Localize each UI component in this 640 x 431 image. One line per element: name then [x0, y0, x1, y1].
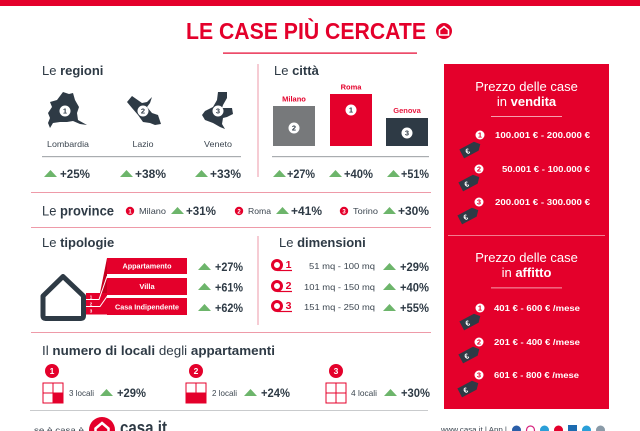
province: Milano: Milano	[139, 206, 166, 216]
stat: Villa	[198, 282, 243, 294]
item: 4 locali: 4 locali	[351, 388, 377, 398]
heading: affitto: in affitto	[502, 265, 551, 280]
province: Milano: +31%	[186, 206, 216, 218]
item: 3 locali	[43, 364, 146, 403]
province: Torino: +30%	[398, 206, 429, 218]
row: 101-150 mq: 101 mq - 150 mq	[304, 282, 375, 292]
icon: house with ribbons: 1	[90, 294, 93, 299]
icon: house with ribbons: 2	[90, 301, 93, 306]
stat: Genova: +51%	[401, 169, 429, 181]
stat: Lazio	[120, 169, 166, 181]
map: Lombardia: 1	[63, 106, 67, 116]
stat: Roma: +40%	[344, 169, 373, 181]
province: Milano: 1	[128, 209, 132, 215]
row: affitto 3	[457, 370, 579, 397]
province: Roma	[235, 206, 322, 218]
bar: Milano: Milano	[282, 94, 306, 104]
row: 151-250 mq: 151 mq - 250 mq	[304, 302, 375, 312]
row: affitto 2: 2	[477, 338, 481, 346]
stat: Milano: +27%	[287, 169, 315, 181]
heading: città: Le città	[274, 63, 320, 78]
labels	[47, 139, 232, 149]
row: affitto 1: 401 € - 600 € /mese	[494, 303, 580, 313]
row: affitto 1	[459, 303, 580, 330]
row: 51-100 mq: +29%	[400, 262, 429, 274]
row: 51-100 mq	[272, 259, 429, 274]
footer links	[440, 425, 605, 431]
stat: Lombardia: +25%	[60, 169, 90, 181]
row: vendita 2: 2	[477, 164, 481, 174]
province: Roma: 2	[237, 209, 241, 215]
item: 4 locali: +30%	[401, 388, 430, 400]
row: 151-250 mq	[272, 300, 429, 315]
item: 4 locali	[326, 364, 430, 403]
map: Veneto	[202, 92, 233, 129]
item: 3 locali: 3 locali	[69, 388, 94, 398]
heading: vendita	[475, 79, 578, 117]
bar: Genova: 3	[405, 128, 409, 138]
panel: città	[272, 63, 429, 181]
row: vendita 1: 100.001 € - 200.000 €	[495, 130, 590, 140]
heading: affitto	[475, 250, 578, 288]
panel: province	[42, 204, 429, 218]
row: 151-250 mq: 3	[286, 300, 292, 312]
stat: Veneto: +33%	[210, 169, 241, 181]
title: LE CASE PIÙ CERCATE	[186, 17, 426, 44]
row: 151-250 mq: +55%	[400, 303, 429, 315]
bar: Genova	[386, 106, 428, 146]
map: Lazio	[127, 96, 161, 125]
row: vendita 1	[459, 130, 590, 158]
row: vendita 3	[457, 197, 590, 224]
row: affitto 1: 1	[478, 304, 482, 312]
map: Lombardia	[48, 92, 87, 128]
bar: Roma: 1	[349, 106, 353, 114]
stat: Casa Indipendente: +62%	[215, 303, 243, 315]
row: affitto 3: 601 € - 800 € /mese	[494, 370, 579, 380]
item: 3 locali: 1	[50, 366, 55, 376]
province: Torino: Torino	[353, 206, 378, 216]
row: affitto 2	[458, 337, 580, 363]
heading: numero di locali: Il numero di locali degli appartamenti	[42, 343, 275, 358]
row: vendita 2: 50.001 € - 100.000 €	[502, 164, 590, 174]
item: 3 locali: +29%	[117, 388, 146, 400]
bar: Roma	[330, 82, 372, 146]
item: 2 locali	[186, 364, 290, 403]
stat: Genova	[387, 169, 429, 181]
stat: Milano	[273, 169, 315, 181]
row: vendita 3: 200.001 € - 300.000 €	[495, 197, 590, 207]
bar: Milano	[273, 94, 315, 146]
row: 101-150 mq: 2	[286, 280, 292, 292]
row: 101-150 mq: +40%	[400, 282, 429, 294]
province: Milano	[126, 206, 216, 218]
item: 2 locali: 2 locali	[212, 388, 237, 398]
stat: Casa Indipendente	[198, 303, 243, 315]
bar: Roma: Roma	[341, 82, 362, 92]
labels: Lombardia	[47, 139, 89, 149]
heading: province: Le province	[42, 204, 114, 218]
row: affitto 2: 201 € - 400 € /mese	[494, 337, 580, 347]
bar: Milano: 2	[292, 124, 296, 132]
map: Veneto: 3	[216, 106, 220, 116]
row: 101-150 mq	[272, 280, 429, 294]
map: Lazio: 2	[141, 106, 145, 116]
row: vendita 2	[458, 164, 590, 191]
row: 51-100 mq: 51 mq - 100 mq	[309, 261, 375, 271]
icon: title house	[436, 23, 452, 39]
footer logo	[34, 417, 167, 431]
panel: numero di locali	[42, 343, 430, 403]
top bar	[0, 0, 640, 6]
item: 2 locali: 2	[194, 366, 199, 376]
stat: Lazio: +38%	[135, 169, 166, 181]
row: vendita 1: 1	[478, 130, 482, 140]
stat: Veneto	[195, 169, 241, 181]
stat: Lombardia	[44, 169, 90, 181]
panel: regioni	[42, 63, 241, 181]
panel: tipologie	[42, 235, 243, 318]
stat: Appartamento: +27%	[215, 262, 243, 274]
heading: vendita: in vendita	[497, 94, 557, 109]
heading: vendita: Prezzo delle case	[475, 79, 578, 94]
heading: dimensioni: Le dimensioni	[279, 235, 366, 250]
item: 4 locali: 3	[334, 366, 339, 376]
heading: regioni: Le regioni	[42, 63, 103, 78]
item: 2 locali: +24%	[261, 388, 290, 400]
row: 51-100 mq: 1	[286, 259, 292, 271]
province: Torino: 3	[342, 209, 346, 215]
icon: house with ribbons: Casa Indipendente	[115, 302, 179, 312]
province: Roma: Roma	[248, 206, 271, 216]
heading: affitto: Prezzo delle case	[475, 250, 578, 265]
province: Torino	[340, 206, 429, 218]
icon: house with ribbons: Appartamento	[122, 262, 172, 270]
labels: Lazio	[132, 139, 154, 149]
bar: Genova: Genova	[393, 106, 422, 115]
stat: Appartamento	[198, 262, 243, 274]
panel: dimensioni	[272, 235, 429, 315]
heading: tipologie: Le tipologie	[42, 235, 114, 250]
icon: house with ribbons: 3	[90, 308, 93, 313]
province: Roma: +41%	[291, 206, 322, 218]
icons: social	[512, 425, 605, 431]
row: vendita 3: 3	[477, 198, 481, 206]
panel: prezzi	[444, 64, 609, 409]
icon: house with ribbons	[43, 258, 187, 318]
labels: Veneto	[204, 139, 232, 149]
stat: Villa: +61%	[215, 282, 243, 294]
icon: house with ribbons: Villa	[139, 282, 155, 291]
stat: Roma	[329, 169, 373, 181]
row: affitto 3: 3	[477, 370, 481, 380]
